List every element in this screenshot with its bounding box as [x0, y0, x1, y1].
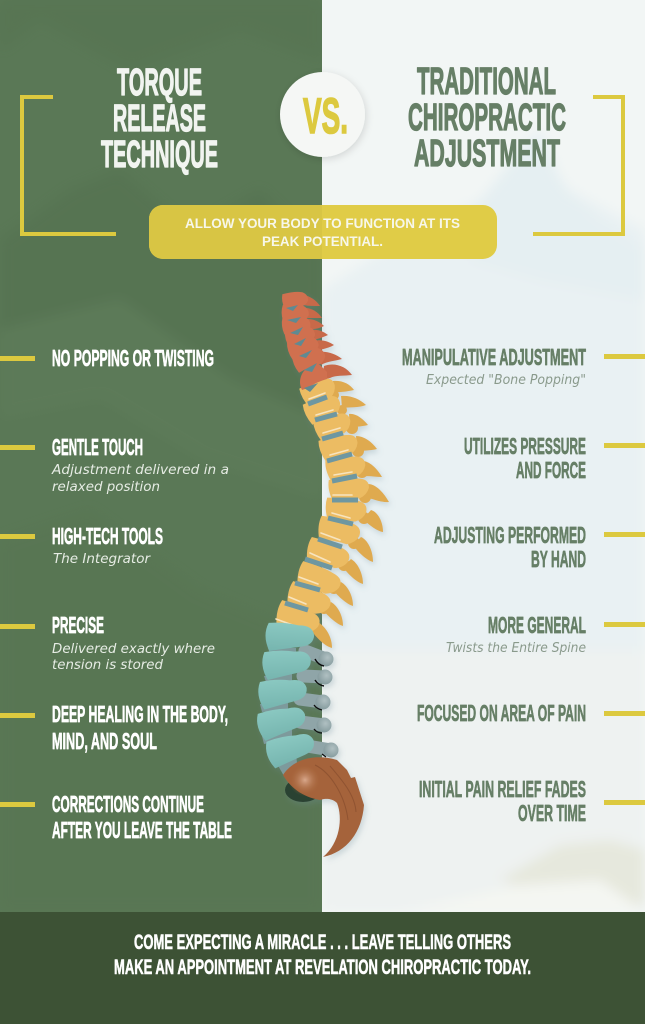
item: pain relief fades: OVER TIME — [518, 800, 586, 826]
tagline pill: ALLOW YOUR BODY TO FUNCTION AT ITS — [185, 216, 460, 231]
item: deep healing: DEEP HEALING IN THE BODY, — [52, 701, 228, 727]
tagline pill: PEAK POTENTIAL. — [262, 234, 383, 249]
item: corrections continue — [0, 791, 232, 843]
footer text — [114, 931, 531, 979]
right list: Traditional adjustment points — [402, 344, 645, 826]
item: no popping — [0, 345, 214, 371]
item: no popping: NO POPPING OR TWISTING — [52, 345, 214, 371]
heading: Traditional Chiropractic Adjustment — [408, 61, 566, 175]
panel: left green background — [0, 0, 322, 912]
item: corrections continue: CORRECTIONS CONTINUE — [52, 791, 204, 817]
item: gentle touch — [0, 434, 229, 495]
item: gentle touch: GENTLE TOUCH — [52, 434, 143, 460]
footer band — [0, 912, 645, 1024]
left title bracket — [20, 95, 116, 236]
item: more general — [446, 612, 645, 656]
intervertebral discs — [285, 397, 358, 610]
item: pain relief fades — [419, 776, 645, 826]
spine illustration — [255, 291, 389, 857]
lumbar disc shadows — [260, 648, 298, 776]
item: performed by hand — [434, 522, 645, 572]
thoracic vertebrae — [273, 375, 370, 639]
item: gentle touch: relaxed position — [52, 480, 160, 495]
cervical processes — [303, 295, 352, 380]
item: precise: tension is stored — [52, 658, 164, 673]
item: manipulative adjustment: Expected "Bone Popping" — [426, 373, 586, 388]
item: corrections continue: AFTER YOU LEAVE THE TABLE — [52, 817, 232, 843]
lumbar processes — [300, 651, 338, 758]
item: gentle touch: Adjustment delivered in a — [51, 463, 229, 478]
VS badge — [280, 72, 365, 157]
item: high-tech tools — [0, 523, 163, 567]
thoracic processes — [311, 381, 389, 648]
item: high-tech tools: The Integrator — [53, 552, 152, 567]
heading: Torque Release Technique — [101, 62, 218, 176]
heading: Torque Release Technique: TORQUE — [117, 62, 202, 104]
item: manipulative adjustment — [402, 344, 645, 388]
item: more general: Twists the Entire Spine — [446, 641, 586, 656]
item: deep healing — [0, 701, 228, 754]
item: high-tech tools: HIGH-TECH TOOLS — [52, 523, 163, 549]
heading: Torque Release Technique: TECHNIQUE — [101, 134, 218, 176]
item: precise: Delivered exactly where — [52, 642, 215, 657]
left list: Torque Release points — [0, 345, 232, 843]
right title bracket — [533, 95, 625, 236]
tagline pill — [149, 205, 497, 259]
sacrum and coccyx — [283, 757, 364, 857]
panel: right light background — [322, 0, 645, 912]
vertebra highlights — [276, 393, 352, 627]
sacrum shadow blob — [285, 778, 321, 802]
heading: Torque Release Technique: RELEASE — [113, 98, 206, 140]
lumbar vertebrae — [255, 622, 318, 769]
VS badge: VS. — [303, 88, 348, 144]
cervical vertebrae — [281, 291, 328, 392]
item: pressure and force — [464, 433, 645, 483]
item: precise: PRECISE — [52, 612, 104, 638]
item: precise — [0, 612, 215, 673]
item: deep healing: MIND, AND SOUL — [52, 728, 157, 754]
item: performed by hand: BY HAND — [531, 546, 586, 572]
